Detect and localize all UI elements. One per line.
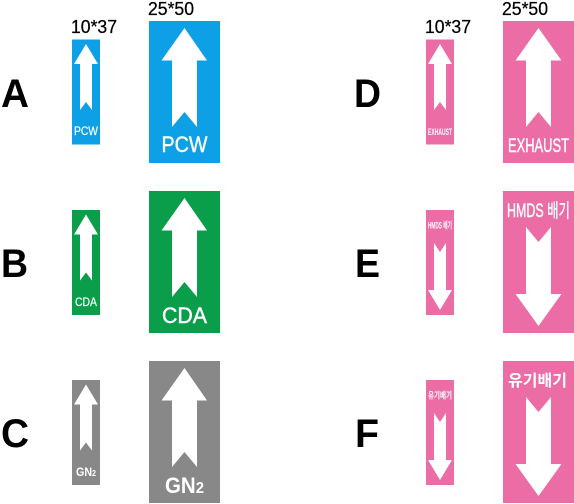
large label A: PCW <box>149 21 220 163</box>
small label E: HMDS exhaust <box>426 210 454 315</box>
large label A: PCW: PCW <box>162 132 208 157</box>
small label A: PCW: PCW <box>74 124 99 138</box>
large label B: CDA: CDA <box>162 303 207 328</box>
small label E: HMDS exhaust: HMDS 배기 <box>428 220 452 230</box>
small label B: CDA: CDA <box>75 295 97 309</box>
row letter C: C <box>1 412 29 456</box>
row letter B: B <box>1 242 28 286</box>
row letter D: D <box>354 72 381 116</box>
size label: small column left: 10*37 <box>71 17 117 37</box>
small label B: CDA <box>72 210 100 315</box>
large label E: HMDS exhaust <box>503 191 574 333</box>
small label A: PCW <box>72 40 100 144</box>
large label D: EXHAUST <box>503 21 574 163</box>
small label C: GN2 <box>72 380 100 485</box>
large label B: CDA <box>149 191 220 333</box>
row letter E: E <box>355 242 380 286</box>
large label F: organic exhaust: 유기배기 <box>508 372 567 390</box>
small label C: GN2: GN2 <box>76 465 96 479</box>
large label C: GN2 <box>149 361 220 503</box>
size label: small column right: 10*37 <box>425 17 471 37</box>
small label D: EXHAUST <box>426 40 454 144</box>
large label F: organic exhaust <box>503 361 574 503</box>
small label D: EXHAUST: EXHAUST <box>428 127 452 138</box>
small label F: organic exhaust: 유기배기 <box>428 390 452 400</box>
small label F: organic exhaust <box>426 380 454 485</box>
row letter F: F <box>355 412 379 456</box>
large label C: GN2: GN2 <box>165 473 204 498</box>
row letter A: A <box>1 72 29 116</box>
